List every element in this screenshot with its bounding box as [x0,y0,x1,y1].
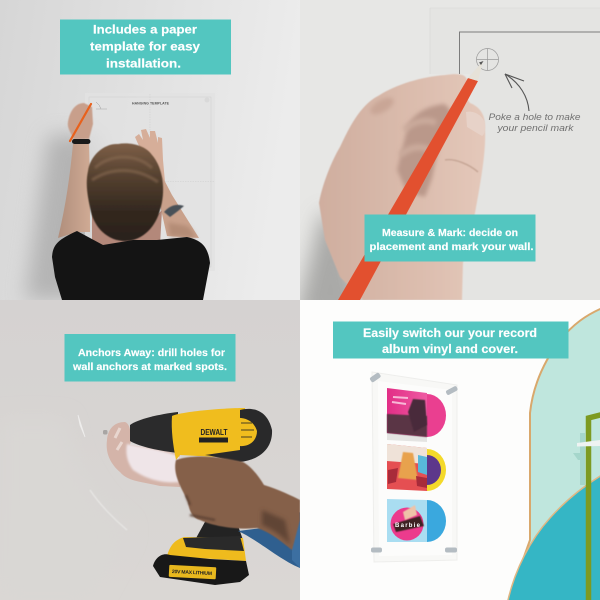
caption box: measure and mark: placement and mark your wall. [370,242,534,253]
black shirt [52,231,210,300]
caption box: switch record: Easily switch our your record [363,328,537,340]
drill handle [196,522,242,538]
caption box: measure and mark: Measure & Mark: decide on [382,228,518,239]
caption box: switch record [333,322,568,358]
caption box: switch record: album vinyl and cover. [382,344,518,356]
panel: switch record [370,308,600,600]
caption box: paper template [60,20,231,74]
panel: paper template [0,0,300,300]
album 3 blue: Barbie [395,523,421,529]
plaster patch on wall [78,415,127,530]
orange pencil [70,104,91,141]
template sheet corner [430,8,600,74]
album 2 colourful [387,444,446,491]
person's right arm and hand [135,129,199,238]
panel: anchors away [0,300,300,600]
note: poke a hole: Poke a hole to make [488,112,580,123]
standoffs [369,372,458,552]
note: poke a hole [488,114,580,133]
caption box: paper template: Includes a paper [93,22,197,36]
caption box: anchors away: Anchors Away: drill holes for [78,348,225,359]
person's left arm and hand [58,103,93,238]
hand holding pencil [319,74,485,300]
paper template sheet [85,93,215,271]
hand shadow [300,208,364,300]
album 3 blue [387,499,446,542]
curved arrow [505,74,529,111]
panel: measure and mark [295,0,600,320]
paper template sheet: HANGING TEMPLATE [132,102,170,106]
crosshair target [476,48,498,70]
palm under chuck [107,422,180,487]
caption box: measure and mark [364,214,536,262]
acrylic frame [372,372,457,562]
yellow drill [130,408,272,462]
album 1 pink [387,388,446,442]
caption box: paper template: template for easy [90,40,200,54]
drill battery: 20V MAX LITHIUM [172,569,212,577]
drill battery [153,536,249,585]
caption box: anchors away [64,334,236,382]
note: poke a hole: your pencil mark [496,123,575,134]
red pencil [338,61,484,300]
head [87,143,163,245]
mirror shape [505,305,600,600]
caption box: paper template: installation. [106,56,181,70]
yellow drill: DEWALT [200,428,228,437]
green rack [577,414,600,600]
caption box: anchors away: wall anchors at marked spots. [72,362,227,373]
gripping hand and forearm [175,456,300,568]
